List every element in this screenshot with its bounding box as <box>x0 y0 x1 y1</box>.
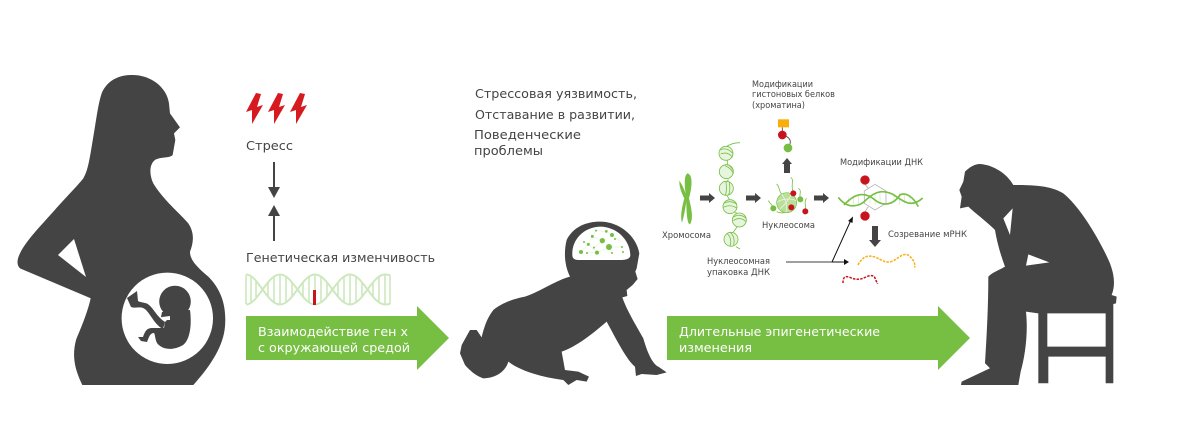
label: histone modifications: (хроматина) <box>752 101 805 111</box>
icon: mrna red <box>843 276 878 284</box>
green arrow: gene-environment interaction: Взаимодействие ген х <box>258 324 408 339</box>
icon: histone modifications <box>778 119 792 152</box>
label: histone modifications <box>752 80 835 111</box>
text block: outcomes: Отставание в развитии, <box>475 107 635 122</box>
text block: outcomes: Поведенческие <box>474 127 581 142</box>
icon: dna methylation <box>838 175 923 221</box>
icon: chromosome <box>679 173 692 224</box>
label: nucleosome: Нуклеосома <box>762 221 815 231</box>
green arrow: long-lasting epigenetic changes <box>667 306 970 370</box>
text block: outcomes <box>474 86 637 158</box>
green arrow: long-lasting epigenetic changes: изменения <box>679 340 752 355</box>
arrow: fibre to nucleosome <box>746 193 761 203</box>
label: stress: Стресс <box>246 138 293 153</box>
arrow: dna to mrna <box>869 226 881 247</box>
label: nucleosomal dna packaging: упаковка ДНК <box>707 268 770 278</box>
icon: nucleosome <box>768 177 808 214</box>
dna strand with mutation <box>246 274 390 305</box>
icon: nucleosome chain <box>719 143 746 249</box>
green arrow: gene-environment interaction: с окружающей средой <box>258 340 410 355</box>
arrow: nucleosome up to histones <box>782 158 792 173</box>
label: histone modifications: Модификации <box>752 80 813 90</box>
green arrow: gene-environment interaction <box>246 306 449 370</box>
pregnant woman silhouette <box>17 75 225 385</box>
arrow: genetics up <box>268 205 280 241</box>
green arrow: long-lasting epigenetic changes: Длительные эпигенетические <box>679 324 880 339</box>
label: mrna maturation: Созревание мРНК <box>888 230 967 240</box>
arrow: chromosome to fibre <box>700 193 715 203</box>
seated man silhouette <box>959 164 1117 385</box>
icon: stress lightning bolts <box>246 93 307 124</box>
label: nucleosomal dna packaging: Нуклеосомная <box>707 257 770 267</box>
label: genetic variability: Генетическая изменчивость <box>246 250 435 265</box>
arrow: packaging to mrna and dna <box>786 216 853 265</box>
text block: outcomes: Стрессовая уязвимость, <box>475 86 637 101</box>
label: histone modifications: гистоновых белков <box>752 90 835 100</box>
crawling baby silhouette <box>460 222 667 385</box>
arrow: stress down <box>268 162 280 198</box>
icon: mrna orange <box>858 254 915 268</box>
label: chromosome: Хромосома <box>662 231 711 241</box>
icon: brain network <box>572 227 630 260</box>
womb circle with fetus <box>122 273 213 364</box>
label: dna modifications: Модификации ДНК <box>840 158 923 168</box>
arrow: nucleosome to dna <box>814 193 829 203</box>
label: nucleosomal dna packaging <box>707 257 770 278</box>
text block: outcomes: проблемы <box>474 143 543 158</box>
